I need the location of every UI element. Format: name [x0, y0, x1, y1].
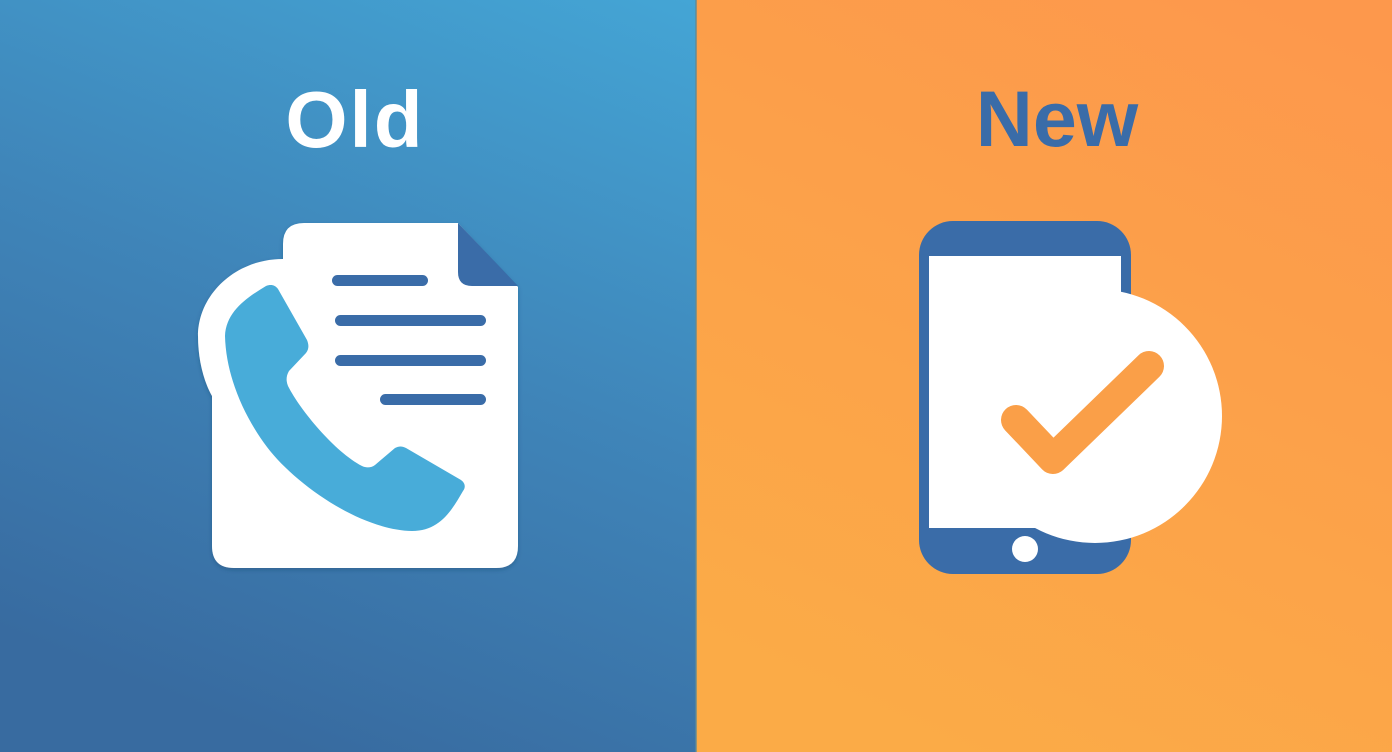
heading: Old: Old	[285, 75, 425, 164]
white badge circle	[968, 289, 1222, 543]
phone body	[919, 221, 1131, 574]
panel: old	[0, 0, 696, 752]
heading: New: New	[976, 74, 1139, 163]
document text lines	[332, 275, 486, 405]
icon: smartphone with check	[919, 221, 1222, 574]
check mark	[1016, 366, 1149, 459]
document sheet	[198, 223, 518, 568]
phone home button	[1012, 536, 1038, 562]
phone screen	[929, 256, 1121, 528]
document corner fold	[458, 223, 518, 286]
icon: document with phone	[198, 223, 518, 568]
icon: phone handset	[225, 285, 465, 531]
panel: new	[695, 0, 1392, 752]
